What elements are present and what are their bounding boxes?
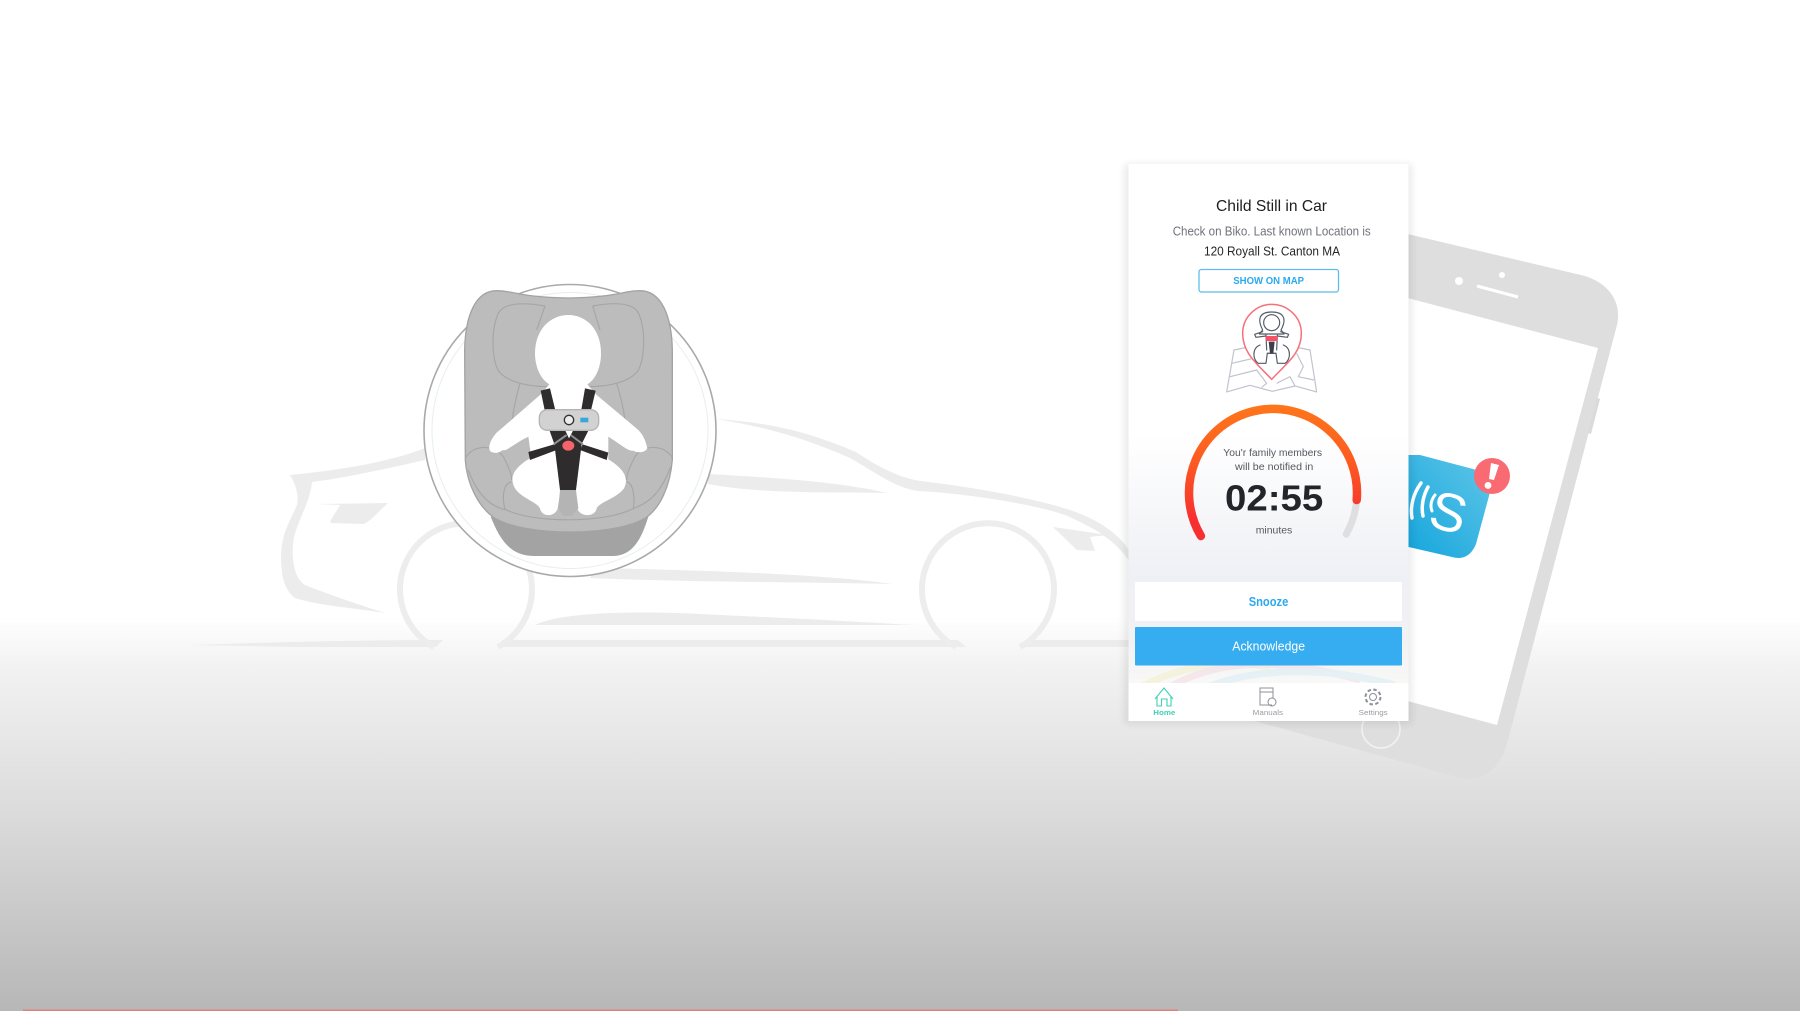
clip dial <box>564 415 574 425</box>
ground line middle <box>498 640 966 647</box>
headlight <box>315 503 388 524</box>
child in seat icon <box>1254 312 1289 363</box>
seat shell <box>465 291 672 532</box>
gauge caption line one: You'r family members <box>1223 447 1322 459</box>
countdown gauge <box>1189 409 1357 536</box>
app icon with alert badge <box>1400 455 1510 558</box>
circle badge <box>424 284 716 576</box>
pin <box>1243 304 1301 379</box>
car hood and front outline <box>281 448 425 613</box>
chest clip sensor <box>539 410 599 430</box>
ground line left <box>192 640 443 647</box>
gauge track <box>1346 500 1357 534</box>
car side streak <box>590 568 893 584</box>
sensor dot <box>1499 272 1505 278</box>
icon: home <box>1155 688 1173 706</box>
address: 120 Royall St. Canton MA <box>1204 244 1341 258</box>
chest clip <box>1266 336 1278 341</box>
acknowledge label: Acknowledge <box>1232 638 1305 654</box>
gauge caption line two: will be notified in <box>1234 461 1313 473</box>
snooze button <box>1135 582 1402 621</box>
inner faint ring <box>432 292 708 568</box>
countdown time: 02:55 <box>1225 478 1323 519</box>
seat detail lines <box>465 304 672 520</box>
phone behind the alert card <box>1240 231 1618 779</box>
home label: Home <box>1153 708 1175 717</box>
side button <box>1588 398 1600 434</box>
card shadow <box>1124 164 1412 724</box>
child silhouette <box>489 315 647 515</box>
rear wheel arch <box>922 523 1054 647</box>
location sentence: Check on Biko. Last known Location is <box>1173 224 1371 238</box>
gauge progress <box>1189 409 1357 536</box>
button outline <box>1199 270 1338 292</box>
camera dot <box>1455 277 1463 285</box>
alert card <box>1128 164 1408 721</box>
S letter: S <box>1423 479 1474 547</box>
button label: SHOW ON MAP <box>1233 276 1304 287</box>
car seat circle illustration <box>424 284 716 576</box>
crotch pad <box>558 490 578 516</box>
car seat and child <box>465 291 672 556</box>
settings label: Settings <box>1359 708 1388 717</box>
bottom tab bar <box>1128 683 1408 721</box>
snooze label: Snooze <box>1249 594 1288 609</box>
bottom progress bar <box>23 1010 1178 1011</box>
folded map <box>1227 346 1317 392</box>
seat base <box>491 517 648 556</box>
phone body <box>1240 231 1618 779</box>
show on map button <box>1199 270 1338 292</box>
minutes label: minutes <box>1256 524 1292 536</box>
car sill streak <box>535 612 915 625</box>
harness buckle arms <box>554 435 583 444</box>
front wheel arch <box>400 523 532 647</box>
manuals label: Manuals <box>1253 708 1283 717</box>
card panel <box>1128 164 1408 683</box>
exclamation mark <box>1485 463 1499 489</box>
snooze panel <box>1135 582 1402 621</box>
harness straps <box>528 388 608 490</box>
acknowledge button <box>1135 627 1402 666</box>
signal waves <box>1411 483 1435 518</box>
phone screen <box>1400 296 1598 725</box>
alert badge <box>1474 458 1510 494</box>
speaker <box>1477 286 1518 297</box>
car roofline <box>716 419 1130 562</box>
map pin with child icon <box>1227 304 1317 392</box>
car outline sketch <box>192 419 1130 647</box>
ground line right <box>1026 640 1130 647</box>
tab bar panel <box>1128 683 1408 721</box>
car door streak <box>708 474 887 493</box>
clip indicator <box>580 418 588 422</box>
icon: manuals <box>1260 688 1276 706</box>
strap pad <box>1269 342 1275 353</box>
tail light <box>1053 527 1108 551</box>
buckle <box>562 441 574 451</box>
acknowledge panel <box>1135 627 1402 666</box>
icon: settings gear <box>1366 690 1380 704</box>
heading: Child Still in Car <box>1216 198 1328 215</box>
pale rainbow strip <box>1135 663 1395 690</box>
home button <box>1362 710 1400 748</box>
app tile <box>1400 455 1490 558</box>
